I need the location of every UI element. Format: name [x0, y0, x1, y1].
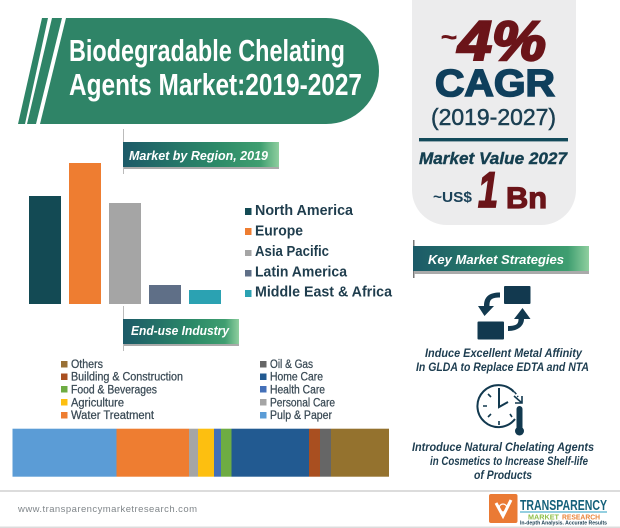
panel: key market strategies ribbon: [413, 240, 589, 278]
logo: Transparency Market Research: In-depth Analysis. Accurate Results: [520, 520, 607, 526]
title banner: [18, 18, 379, 124]
legend: end-use left column: Food & Beverages: [71, 384, 157, 396]
strategy text: natural chelating agents: [412, 440, 594, 482]
strategy text: metal affinity: Induce Excellent Metal Affinity: [425, 346, 583, 360]
legend: end-use left column: Building & Construction: [71, 372, 183, 384]
ribbon: End-use Industry: End-use Industry: [131, 324, 230, 338]
market value label: Market Value 2027: [419, 149, 569, 168]
legend: end-use left column: Agriculture: [71, 398, 124, 410]
strategy text: natural chelating agents: in Cosmetics to Increase Shelf-life: [430, 454, 588, 468]
legend: regions: Europe: [255, 222, 303, 240]
legend: end-use left column: [61, 359, 183, 422]
panel: CAGR and market value: [412, 0, 576, 225]
icon: clock with thermometer: [477, 385, 524, 436]
CAGR period: (2019-2027): [431, 104, 556, 130]
logo: Transparency Market Research: MARKET: [528, 512, 559, 522]
website url: www.transparencymarketresearch.com: [17, 504, 197, 515]
legend: end-use right column: Pulp & Paper: [270, 410, 332, 422]
bar chart: market by region: [29, 163, 221, 304]
legend: regions: [245, 202, 393, 300]
legend: regions: Latin America: [255, 264, 348, 280]
market value figure: 1: [478, 162, 498, 218]
title text: [69, 33, 362, 102]
panel: key market strategies ribbon: Key Market Strategies: [428, 253, 564, 267]
stacked bar: end-use share: [12, 429, 389, 477]
market value figure: ~US$: [433, 189, 473, 206]
strategy text: metal affinity: In GLDA to Replace EDTA and NTA: [416, 360, 589, 374]
ribbon: End-use Industry: [123, 306, 239, 351]
title text: Biodegradable Chelating: [69, 33, 345, 68]
market value figure: [433, 162, 547, 218]
CAGR percentage: ~: [440, 21, 457, 54]
strategy text: natural chelating agents: of Products: [474, 468, 532, 482]
legend: end-use right column: Home Care: [270, 372, 323, 384]
title text: Agents Market:2019-2027: [69, 67, 362, 102]
logo: Transparency Market Research: RESEARCH: [562, 512, 600, 522]
legend: end-use right column: Oil & Gas: [270, 359, 313, 371]
legend: end-use right column: Health Care: [270, 384, 325, 396]
market value figure: Bn: [506, 182, 547, 215]
strategy text: metal affinity: [416, 346, 589, 374]
ribbon: Market by Region: Market by Region, 2019: [129, 149, 268, 163]
legend: end-use right column: Personal Care: [270, 398, 335, 410]
legend: end-use left column: Others: [71, 359, 103, 371]
CAGR percentage: 4%: [457, 9, 546, 72]
legend: end-use right column: [260, 359, 335, 422]
icon: exchange arrows: [478, 286, 530, 340]
legend: regions: Middle East & Africa: [255, 284, 393, 300]
strategy text: natural chelating agents: Introduce Natural Chelating Agents: [412, 440, 594, 454]
legend: regions: North America: [255, 202, 354, 219]
CAGR label: CAGR: [435, 63, 555, 105]
legend: end-use left column: Water Treatment: [71, 410, 155, 422]
legend: regions: Asia Pacific: [255, 243, 329, 260]
logo: Transparency Market Research: [489, 494, 607, 526]
ribbon: Market by Region: [123, 129, 279, 174]
